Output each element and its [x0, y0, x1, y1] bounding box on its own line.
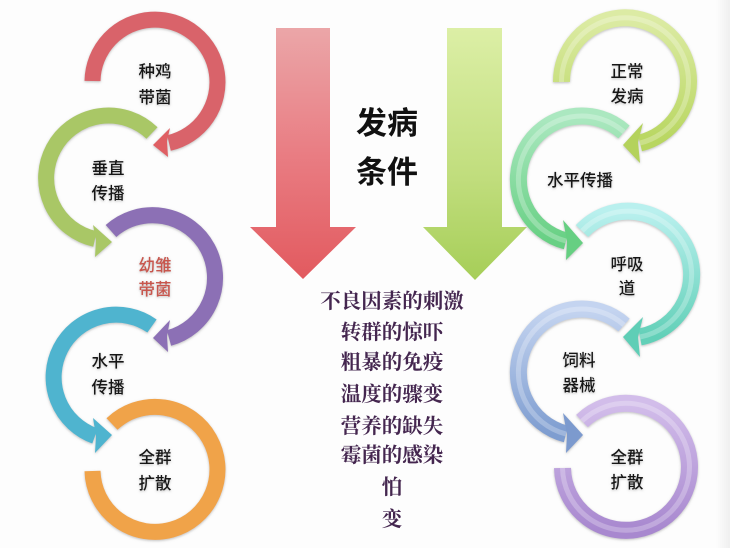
left ring 5: orange: 扩散	[138, 474, 172, 493]
left ring 5: orange	[92, 407, 217, 532]
right ring 4: periwinkle	[518, 309, 624, 453]
central heading: 发病	[356, 106, 418, 141]
left ring 4: blue: 水平	[92, 352, 124, 371]
right ring 3: cyan	[582, 211, 692, 357]
left ring 3: purple: 带菌	[138, 280, 172, 299]
left ring 1: red: 带菌	[138, 88, 172, 107]
left ring 1: red: 种鸡	[138, 62, 172, 81]
central list of stress factors: 温度的骤变	[341, 382, 444, 406]
central list of stress factors: 霉菌的感染	[341, 443, 443, 467]
right ring 4: periwinkle: 饲料	[562, 351, 596, 370]
left ring 2: green	[46, 116, 152, 257]
left ring 3: purple: 幼雏	[138, 256, 172, 275]
left ring 4: blue: 传播	[92, 378, 125, 397]
right ring 1: yellow-green: 发病	[610, 87, 644, 106]
right ring 3: cyan: 呼吸	[610, 255, 644, 274]
red down arrow	[250, 28, 356, 279]
central list of stress factors: 怕	[382, 476, 402, 499]
right ring 2: mint: 水平传播	[547, 171, 614, 190]
central list of stress factors: 不良因素的刺激	[320, 290, 464, 313]
right ring 5: lilac: 全群	[610, 447, 644, 467]
central heading	[356, 106, 418, 190]
central list of stress factors: 营养的缺失	[341, 414, 444, 438]
right ring 1: yellow-green: 正常	[610, 62, 644, 81]
central list of stress factors: 转群的惊吓	[341, 321, 445, 344]
right ring 5: lilac: 扩散	[610, 473, 644, 492]
right ring 1: yellow-green	[561, 18, 688, 163]
left ring 1: red	[92, 20, 217, 157]
right ring 5: lilac	[562, 403, 689, 530]
background edge shading	[716, 0, 730, 548]
central list of stress factors: 粗暴的免疫	[341, 350, 444, 374]
central list of stress factors	[320, 290, 464, 531]
left ring 4: blue	[54, 315, 152, 453]
central list of stress factors: 变	[382, 507, 403, 531]
left ring 5: orange: 全群	[138, 447, 172, 467]
central heading: 条件	[356, 155, 418, 190]
left ring 2: green: 垂直	[92, 159, 124, 178]
left ring 2: green: 传播	[92, 184, 125, 203]
right ring 4: periwinkle: 器械	[562, 376, 596, 395]
right ring 2: mint	[518, 116, 624, 260]
green down arrow	[423, 28, 527, 280]
left ring 3: purple	[111, 215, 215, 352]
right ring 3: cyan: 道	[619, 279, 635, 298]
